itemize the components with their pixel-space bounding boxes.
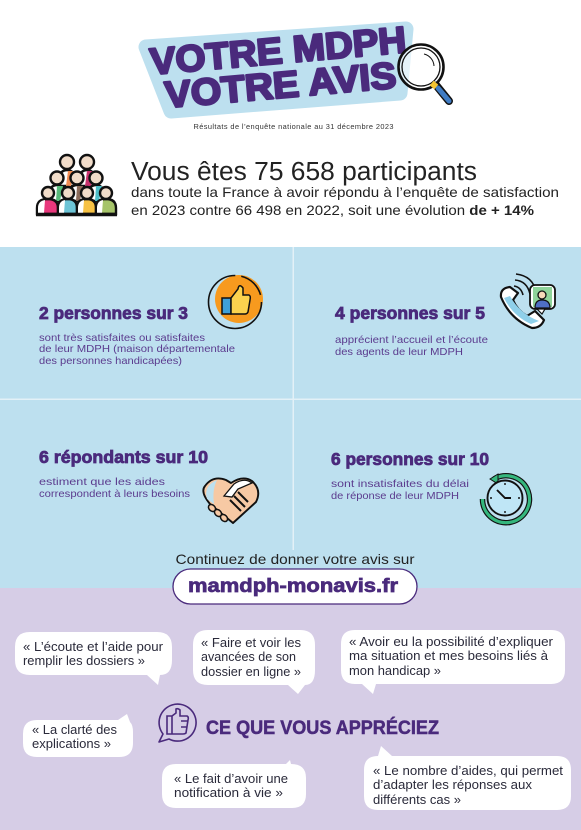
logo title: VOTRE MDPH [148, 19, 408, 82]
panel: 6 personnes sur 10: sont insatisfaites du délai [331, 479, 469, 490]
logo title [146, 19, 449, 116]
bubble: nombre d'aides [364, 746, 571, 810]
logo title: VOTRE AVIS [163, 55, 398, 116]
panel: 2 personnes sur 3 [39, 275, 263, 367]
icon: handshake heart [203, 478, 258, 523]
bubble: nombre d'aides: d’adapter les réponses aux [373, 777, 533, 792]
panel: 6 personnes sur 10: de réponse de leur MDPH [331, 491, 459, 502]
panel: 6 répondants sur 10: correspondent à leurs besoins [39, 489, 190, 500]
bubble: notification: notification à vie » [174, 785, 283, 800]
panel: 2 personnes sur 3: 2 personnes sur 3 [39, 303, 188, 323]
icon: magnifying glass [398, 44, 449, 101]
bubble: nombre d'aides: « Le nombre d’aides, qui permet [373, 763, 563, 778]
heading: ce que vous appréciez: CE QUE VOUS APPRÉCIEZ [206, 717, 439, 739]
bubble: avancées: avancées de son [201, 649, 296, 664]
bubble: écoute: « L’écoute et l’aide pour [23, 639, 164, 654]
bubble: clarté [23, 714, 133, 757]
panel: 4 personnes sur 5: des agents de leur MDPH [335, 347, 463, 358]
heading: participants: Vous êtes 75 658 participants [131, 158, 477, 186]
bubble: clarté: explications » [32, 736, 111, 751]
bubble: nombre d'aides: différents cas » [373, 792, 461, 807]
panel: 2 personnes sur 3: sont très satisfaites ou satisfaites [39, 333, 205, 344]
button: website address: mamdph-monavis.fr [188, 576, 399, 597]
bubble: possibilité d'expliquer: « Avoir eu la possibilité d’expliquer [349, 634, 554, 649]
text: participants detail: en 2023 contre 66 498 en 2022, soit une évolution de + 14% [131, 202, 535, 218]
panel: blue statistics background [0, 247, 581, 588]
icon: crowd of participants [36, 155, 117, 214]
bubble: écoute [15, 632, 172, 685]
panel: 6 répondants sur 10: estiment que les aides [39, 477, 165, 488]
panel: 4 personnes sur 5: apprécient l’accueil et l’écoute [335, 335, 488, 346]
panel: 2 personnes sur 3: de leur MDPH (maison départementale [39, 344, 235, 355]
panel: 4 personnes sur 5 [335, 274, 555, 358]
panel: 6 personnes sur 10: 6 personnes sur 10 [331, 449, 489, 469]
bubble: écoute: remplir les dossiers » [23, 653, 145, 668]
icon: telephone with agent [501, 274, 555, 328]
panel: 2 personnes sur 3: des personnes handicapées) [39, 356, 182, 367]
panel: purple comments background [0, 588, 581, 830]
text: call to action: Continuez de donner votre avis sur [176, 551, 415, 567]
panel: 6 répondants sur 10 [39, 447, 258, 523]
bubble: notification: « Le fait d’avoir une [174, 771, 288, 786]
subtitle: Résultats de l’enquête nationale au 31 décembre 2023 [194, 122, 394, 131]
bubble: avancées: dossier en ligne » [201, 664, 301, 679]
panel: 6 personnes sur 10 [331, 449, 529, 523]
bubble: avancées [193, 630, 315, 694]
bubble: possibilité d'expliquer [341, 630, 565, 694]
panel: 6 répondants sur 10: 6 répondants sur 10 [39, 447, 208, 467]
bubble: clarté: « La clarté des [32, 722, 117, 737]
bubble: possibilité d'expliquer: mon handicap » [349, 663, 441, 678]
bubble: possibilité d'expliquer: ma situation et mes besoins liés à [349, 648, 549, 663]
bubble: notification [162, 760, 306, 808]
bubble: avancées: « Faire et voir les [201, 635, 302, 650]
button: website address [173, 569, 417, 604]
text: participants detail [131, 184, 559, 218]
icon: thumbs up [208, 275, 263, 328]
panel: 4 personnes sur 5: 4 personnes sur 5 [335, 303, 485, 323]
icon: clock with arrow [482, 474, 529, 523]
icon: thumbs up speech bubble [159, 704, 196, 742]
text: participants detail: dans toute la France à avoir répondu à l’enquête de satisfaction [131, 184, 559, 200]
